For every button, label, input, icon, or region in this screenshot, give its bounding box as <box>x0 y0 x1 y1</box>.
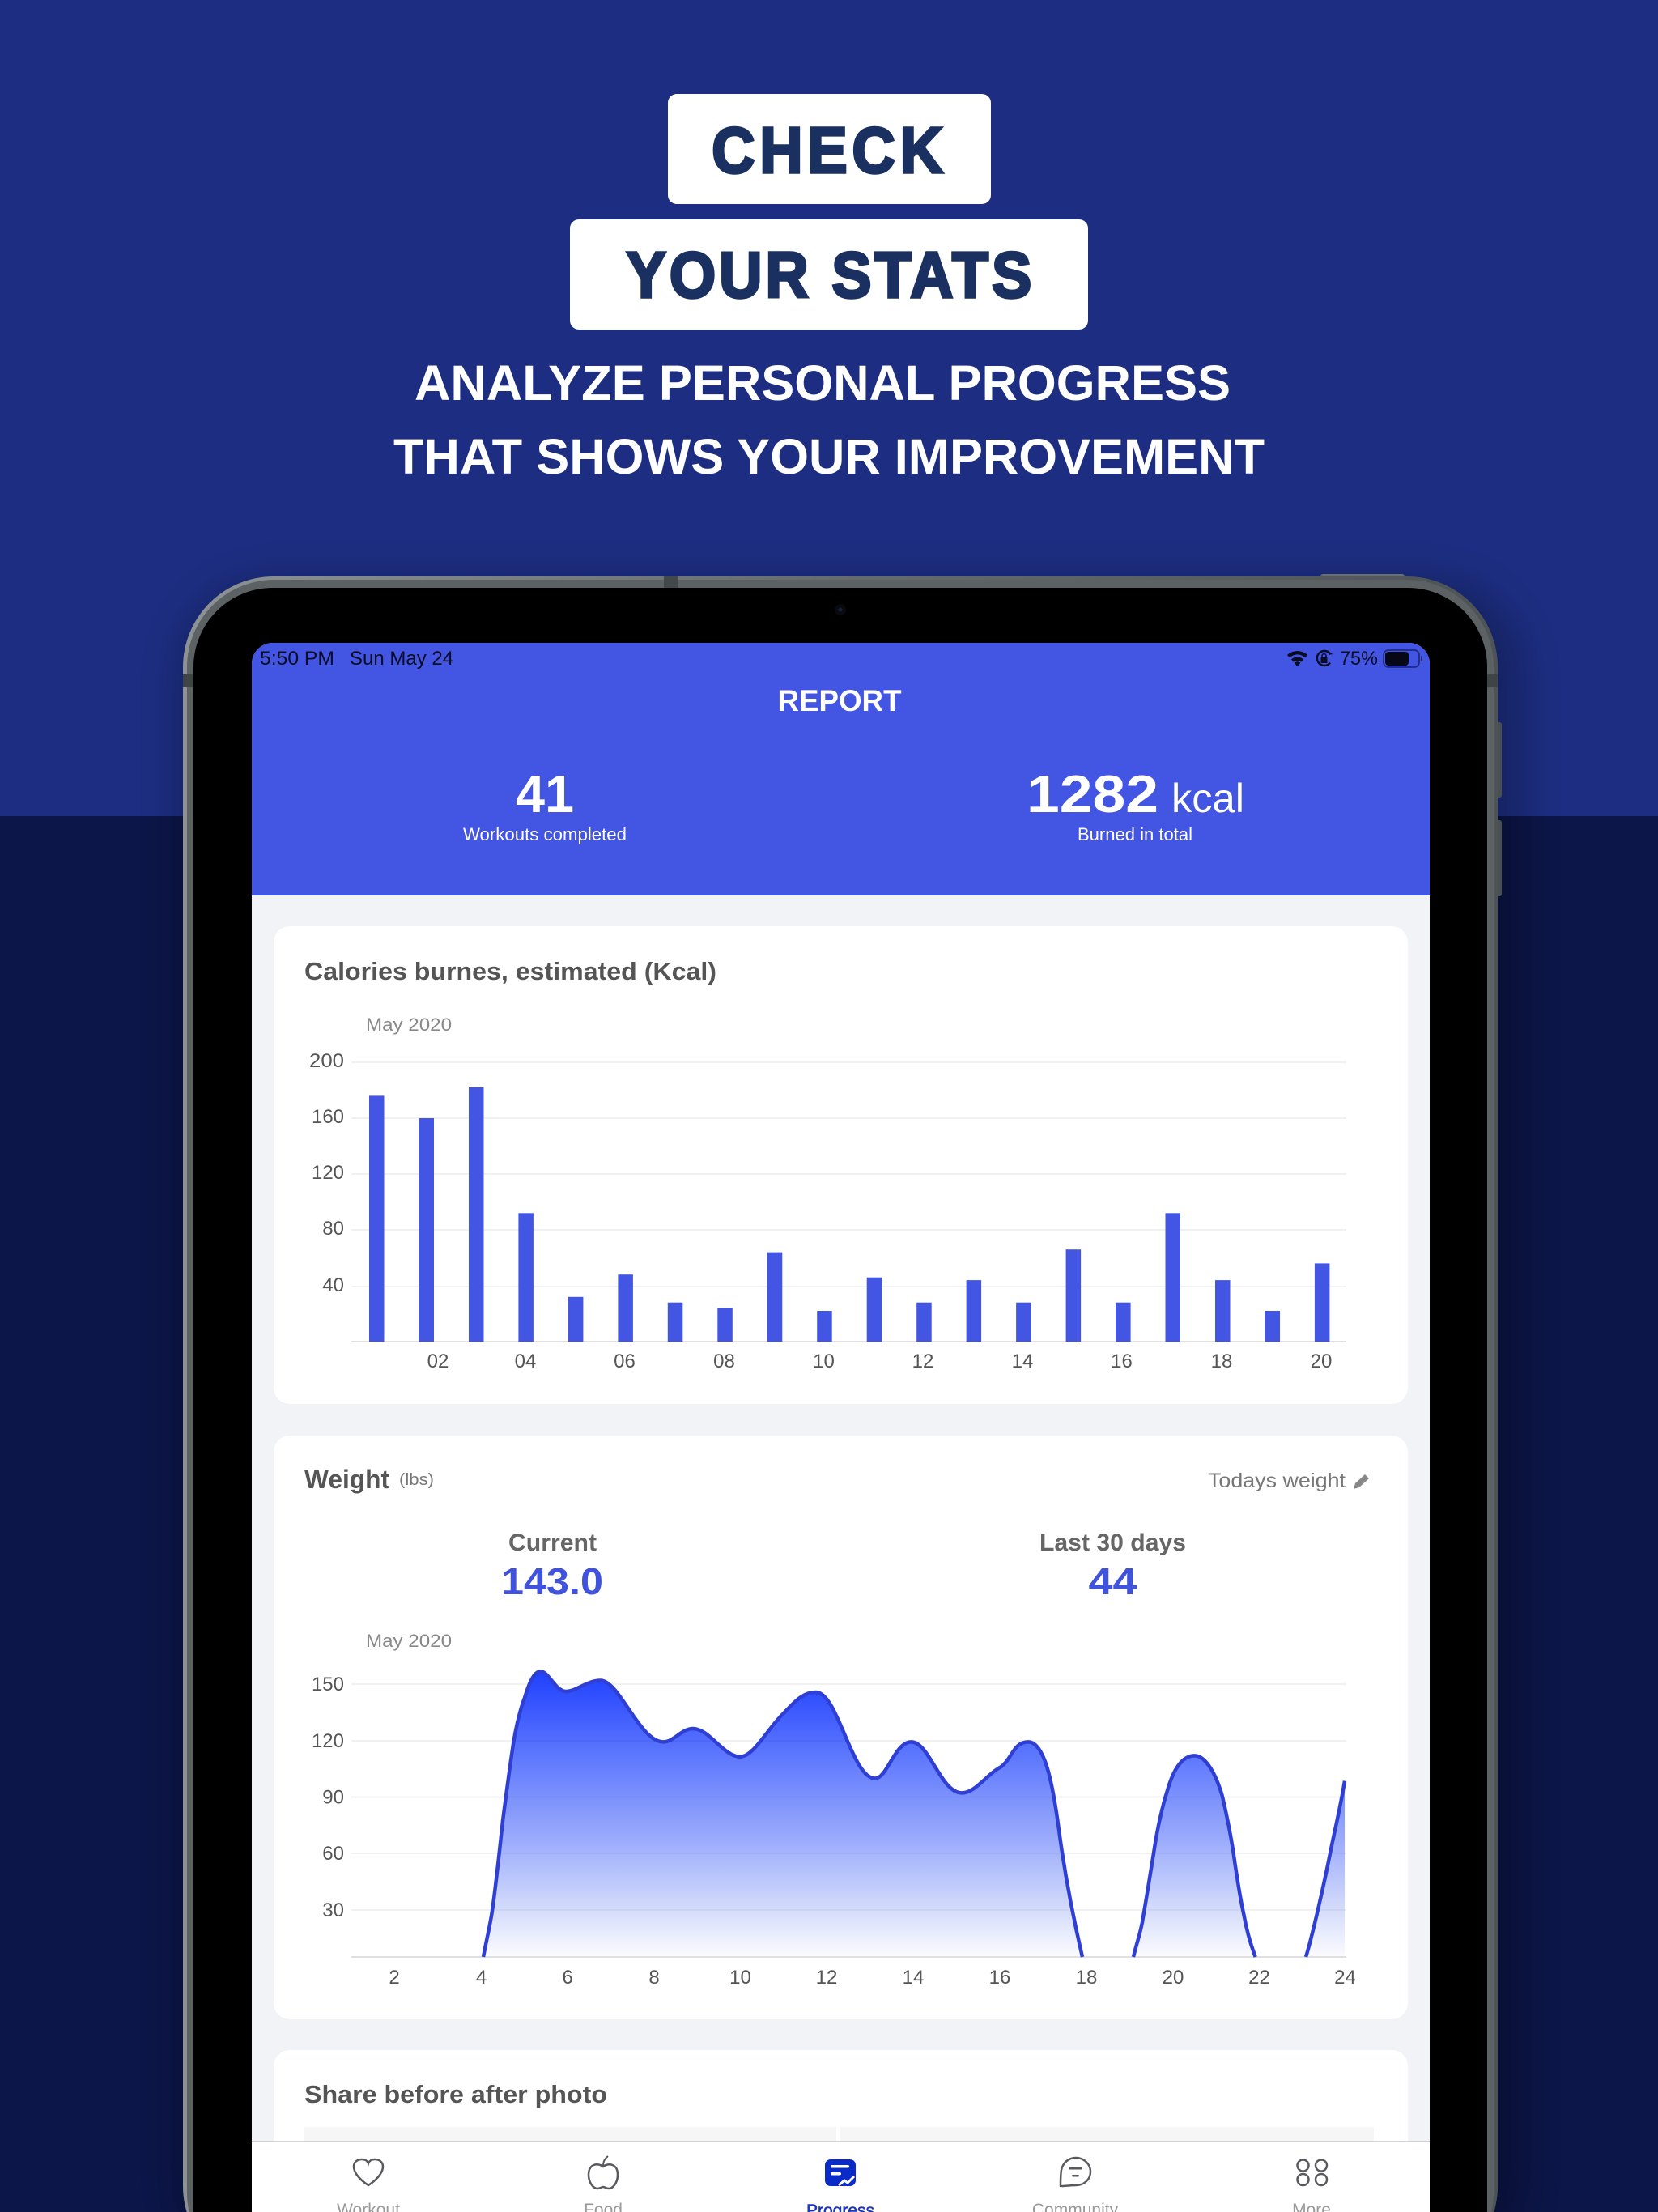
weight title <box>304 1469 433 1493</box>
bar chart: calories per day: 18 <box>1211 1351 1232 1372</box>
area chart: weight per day: 12 <box>816 1967 837 1989</box>
bar chart: calories per day: 20 <box>1311 1351 1332 1372</box>
header title: REPORT <box>777 684 902 717</box>
area chart: weight per day: 10 <box>729 1967 751 1989</box>
stat: last 30 days: 44 <box>1088 1560 1137 1602</box>
stat: burned calories <box>1030 776 1242 840</box>
weight title: Weight <box>304 1465 389 1494</box>
heading: CHECK: CHECK <box>712 114 948 187</box>
bar chart: calories per day: 10 <box>813 1351 835 1372</box>
status bar: indicators: 75% <box>1340 648 1378 670</box>
tab: progress (active) <box>806 2159 874 2212</box>
bar chart: calories per day: 200 <box>309 1050 344 1072</box>
stat: last 30 days: Last 30 days <box>1039 1529 1186 1556</box>
panel: report header <box>252 643 1430 895</box>
chart period label: May 2020 <box>366 1015 452 1035</box>
bar chart: calories per day: 14 <box>1012 1351 1033 1372</box>
device shadow <box>175 576 1527 2212</box>
heading: YOUR STATS <box>570 219 1088 330</box>
stat: burned calories: kcal <box>1171 776 1244 821</box>
stat: burned calories: 1282 <box>1027 764 1158 823</box>
status bar: time and date: Sun May 24 <box>350 648 453 670</box>
stat: current weight <box>504 1534 602 1595</box>
status bar: time and date: 5:50 PM <box>260 648 334 670</box>
tab bar <box>252 2141 1430 2212</box>
heading: CHECK <box>668 94 991 204</box>
tab: workout <box>337 2159 400 2212</box>
tab: community <box>1032 2158 1119 2212</box>
background: upper band <box>0 0 1658 816</box>
background: lower band <box>0 816 1658 2212</box>
stat: workouts completed: Workouts completed <box>463 824 627 844</box>
status bar: time and date <box>261 651 453 669</box>
area chart: weight per day: 20 <box>1163 1967 1184 1989</box>
before photo slot <box>304 2127 836 2141</box>
weight title: (lbs) <box>399 1471 434 1489</box>
stat: current weight: 143.0 <box>501 1560 603 1602</box>
area chart: weight per day: 4 <box>476 1967 487 1989</box>
area chart: weight per day: 14 <box>903 1967 924 1989</box>
panel: share photo card <box>274 2050 1408 2141</box>
after photo slot <box>840 2127 1374 2141</box>
stat: workouts completed: 41 <box>516 764 574 823</box>
bar chart: calories per day: 06 <box>614 1351 636 1372</box>
screen <box>252 643 1430 2212</box>
area chart: weight per day: 16 <box>989 1967 1010 1989</box>
area chart: weight per day <box>312 1671 1356 1989</box>
bar chart: calories per day: 04 <box>515 1351 536 1372</box>
area chart: weight per day: 2 <box>389 1967 400 1989</box>
area chart: weight per day: 90 <box>322 1786 344 1809</box>
device: tablet frame <box>183 574 1502 2212</box>
todays weight action: Todays weight <box>1208 1470 1346 1492</box>
panel: weight chart card <box>274 1436 1408 2019</box>
area chart: weight per day: 30 <box>322 1899 344 1921</box>
area chart: weight per day: 18 <box>1076 1967 1097 1989</box>
area chart: weight per day: 6 <box>562 1967 573 1989</box>
subtitle text: THAT SHOWS YOUR IMPROVEMENT <box>393 429 1265 484</box>
area chart: weight per day: 120 <box>312 1730 344 1752</box>
icon: front camera <box>835 604 846 615</box>
share title: Share before after photo <box>304 2080 607 2108</box>
chart title: Calories burnes, estimated (Kcal) <box>304 957 716 985</box>
heading: YOUR STATS: YOUR STATS <box>627 239 1035 312</box>
subtitle text: ANALYZE PERSONAL PROGRESS <box>414 355 1231 410</box>
status bar: indicators <box>1287 649 1422 668</box>
bar chart: calories per day: 40 <box>322 1274 344 1296</box>
area chart: weight per day: 150 <box>312 1674 344 1695</box>
area chart: weight per day: 60 <box>322 1843 344 1865</box>
bar chart: calories per day: 120 <box>312 1162 344 1184</box>
panel: calories chart card <box>274 926 1408 1404</box>
bar chart: calories per day: 80 <box>322 1218 344 1240</box>
bar chart: calories per day <box>309 1050 1346 1372</box>
bar chart: calories per day: 02 <box>427 1351 449 1372</box>
todays weight action <box>1208 1473 1369 1491</box>
stat: workouts completed <box>463 776 626 844</box>
area chart: weight per day: 24 <box>1334 1967 1356 1989</box>
bar chart: calories per day: 08 <box>713 1351 735 1372</box>
bar chart: calories per day: 160 <box>312 1106 344 1128</box>
tab: more <box>1292 2160 1331 2212</box>
stat: current weight: Current <box>508 1529 597 1556</box>
bar chart: calories per day: 16 <box>1111 1351 1133 1372</box>
area chart: weight per day: 8 <box>648 1967 660 1989</box>
stat: last 30 days <box>1041 1534 1185 1594</box>
area chart: weight per day: 22 <box>1248 1967 1270 1989</box>
chart period label: May 2020 <box>366 1631 452 1651</box>
bar chart: calories per day: 12 <box>912 1351 933 1372</box>
stat: burned calories: Burned in total <box>1078 824 1192 844</box>
tab: food <box>584 2156 623 2212</box>
subtitle text <box>393 355 1265 484</box>
